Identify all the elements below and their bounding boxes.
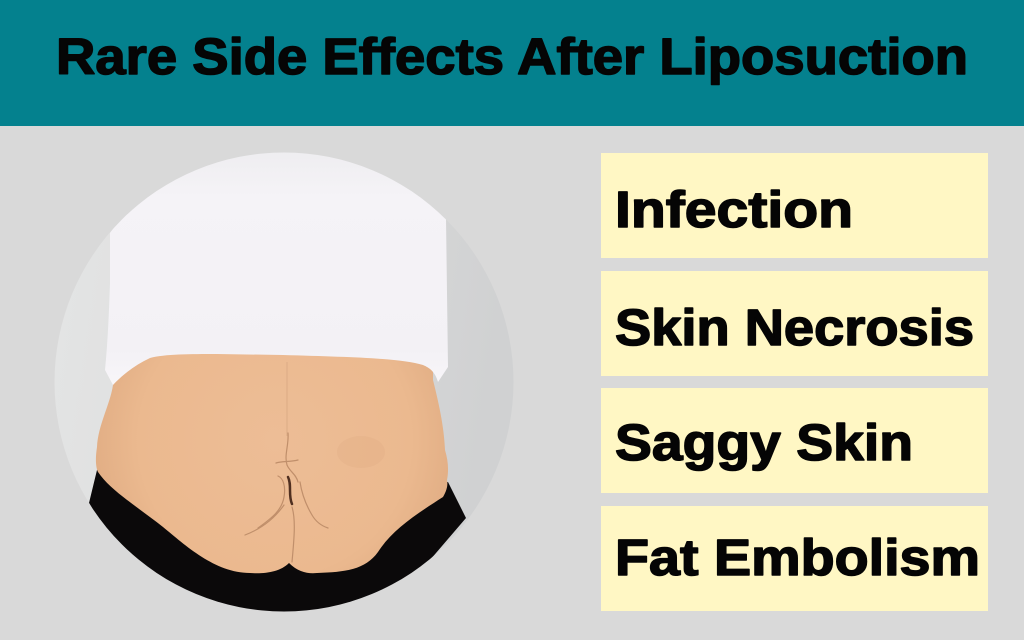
- photo: abdomen in circular frame: [54, 150, 514, 630]
- navel and stretch creases: [245, 433, 328, 562]
- black waistband: [89, 470, 466, 612]
- list item: Infection: [601, 153, 988, 258]
- white shirt: [105, 150, 448, 385]
- title: Rare Side Effects After Liposuction: [56, 28, 968, 85]
- list item: Fat Embolism: Fat Embolism: [615, 529, 980, 586]
- belly: [96, 340, 448, 573]
- list item: Saggy Skin: [601, 388, 988, 493]
- flank shadow: [337, 436, 385, 468]
- belly midline: [286, 362, 288, 436]
- list item: Saggy Skin: Saggy Skin: [615, 414, 913, 471]
- list item: Skin Necrosis: Skin Necrosis: [615, 299, 974, 356]
- list item: Skin Necrosis: [601, 271, 988, 376]
- list item: Infection: Infection: [615, 181, 853, 238]
- list item: Fat Embolism: [601, 506, 988, 611]
- title banner: [0, 0, 1024, 126]
